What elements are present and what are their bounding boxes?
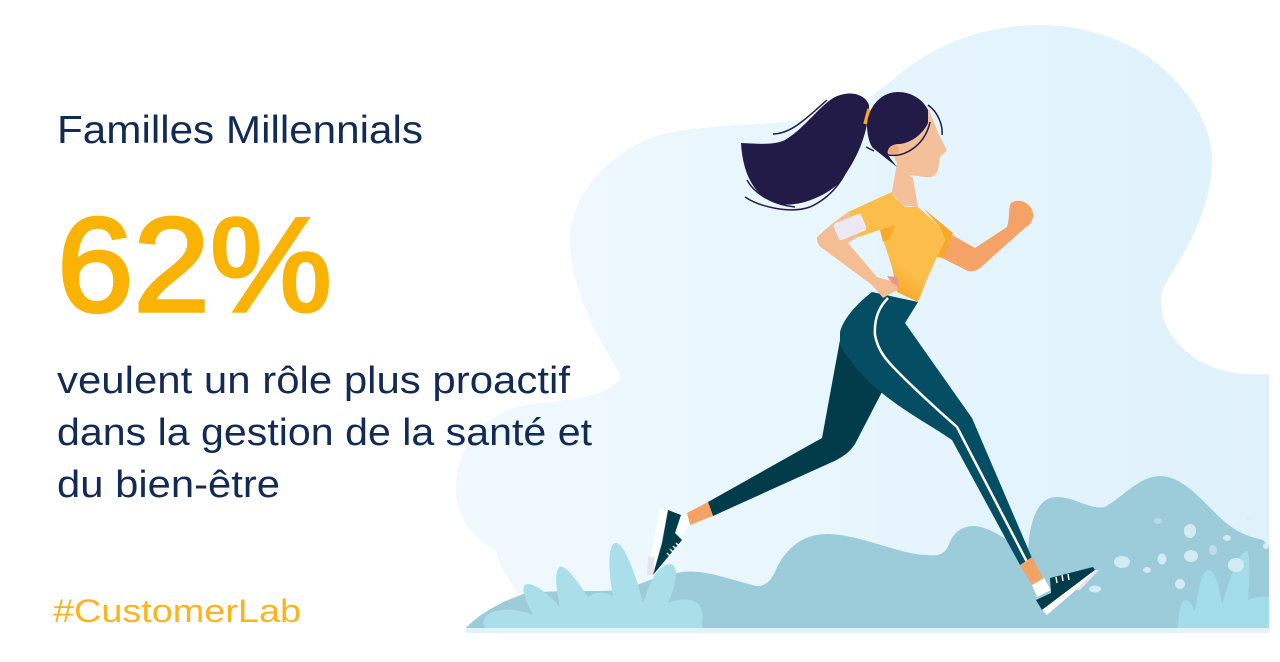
description text: dans la gestion de la santé et xyxy=(57,412,592,454)
neck xyxy=(892,163,918,207)
front hair strands xyxy=(866,105,942,155)
plant: right bush xyxy=(1178,551,1269,628)
legging stripe xyxy=(875,298,1027,562)
back shoe xyxy=(647,508,682,575)
hills xyxy=(466,476,1269,628)
back sock xyxy=(673,513,690,535)
hair strands xyxy=(745,100,850,210)
description text xyxy=(57,360,592,506)
pink shadow xyxy=(887,276,899,287)
description text: du bien-être xyxy=(57,464,280,506)
armband xyxy=(833,213,867,241)
description text: veulent un rôle plus proactif xyxy=(57,360,570,402)
runner figure xyxy=(647,92,1099,615)
back leg xyxy=(708,340,882,516)
shirt xyxy=(848,192,945,302)
front ankle xyxy=(1020,557,1044,585)
hair cap xyxy=(867,92,928,167)
far arm with fist xyxy=(942,201,1033,271)
back ankle xyxy=(687,502,713,525)
background blob xyxy=(456,25,1269,633)
hair tie xyxy=(865,109,869,124)
plant: left bush xyxy=(483,543,702,628)
front sock xyxy=(1032,578,1051,597)
heading: Familles Millennials: Familles Millennials xyxy=(57,109,423,152)
near arm xyxy=(817,212,898,298)
ponytail xyxy=(741,94,869,205)
shirt sleeve shadow xyxy=(923,208,953,258)
hashtag: #CustomerLab: #CustomerLab xyxy=(53,593,301,629)
front shoe xyxy=(1036,567,1099,615)
front leg xyxy=(840,292,1032,565)
illustration: running woman scene xyxy=(456,25,1269,633)
splash dots xyxy=(1089,515,1269,592)
ground band xyxy=(466,628,1269,633)
face xyxy=(888,108,947,177)
big statistic: 62%: 62% xyxy=(57,191,332,340)
ear xyxy=(887,144,899,156)
